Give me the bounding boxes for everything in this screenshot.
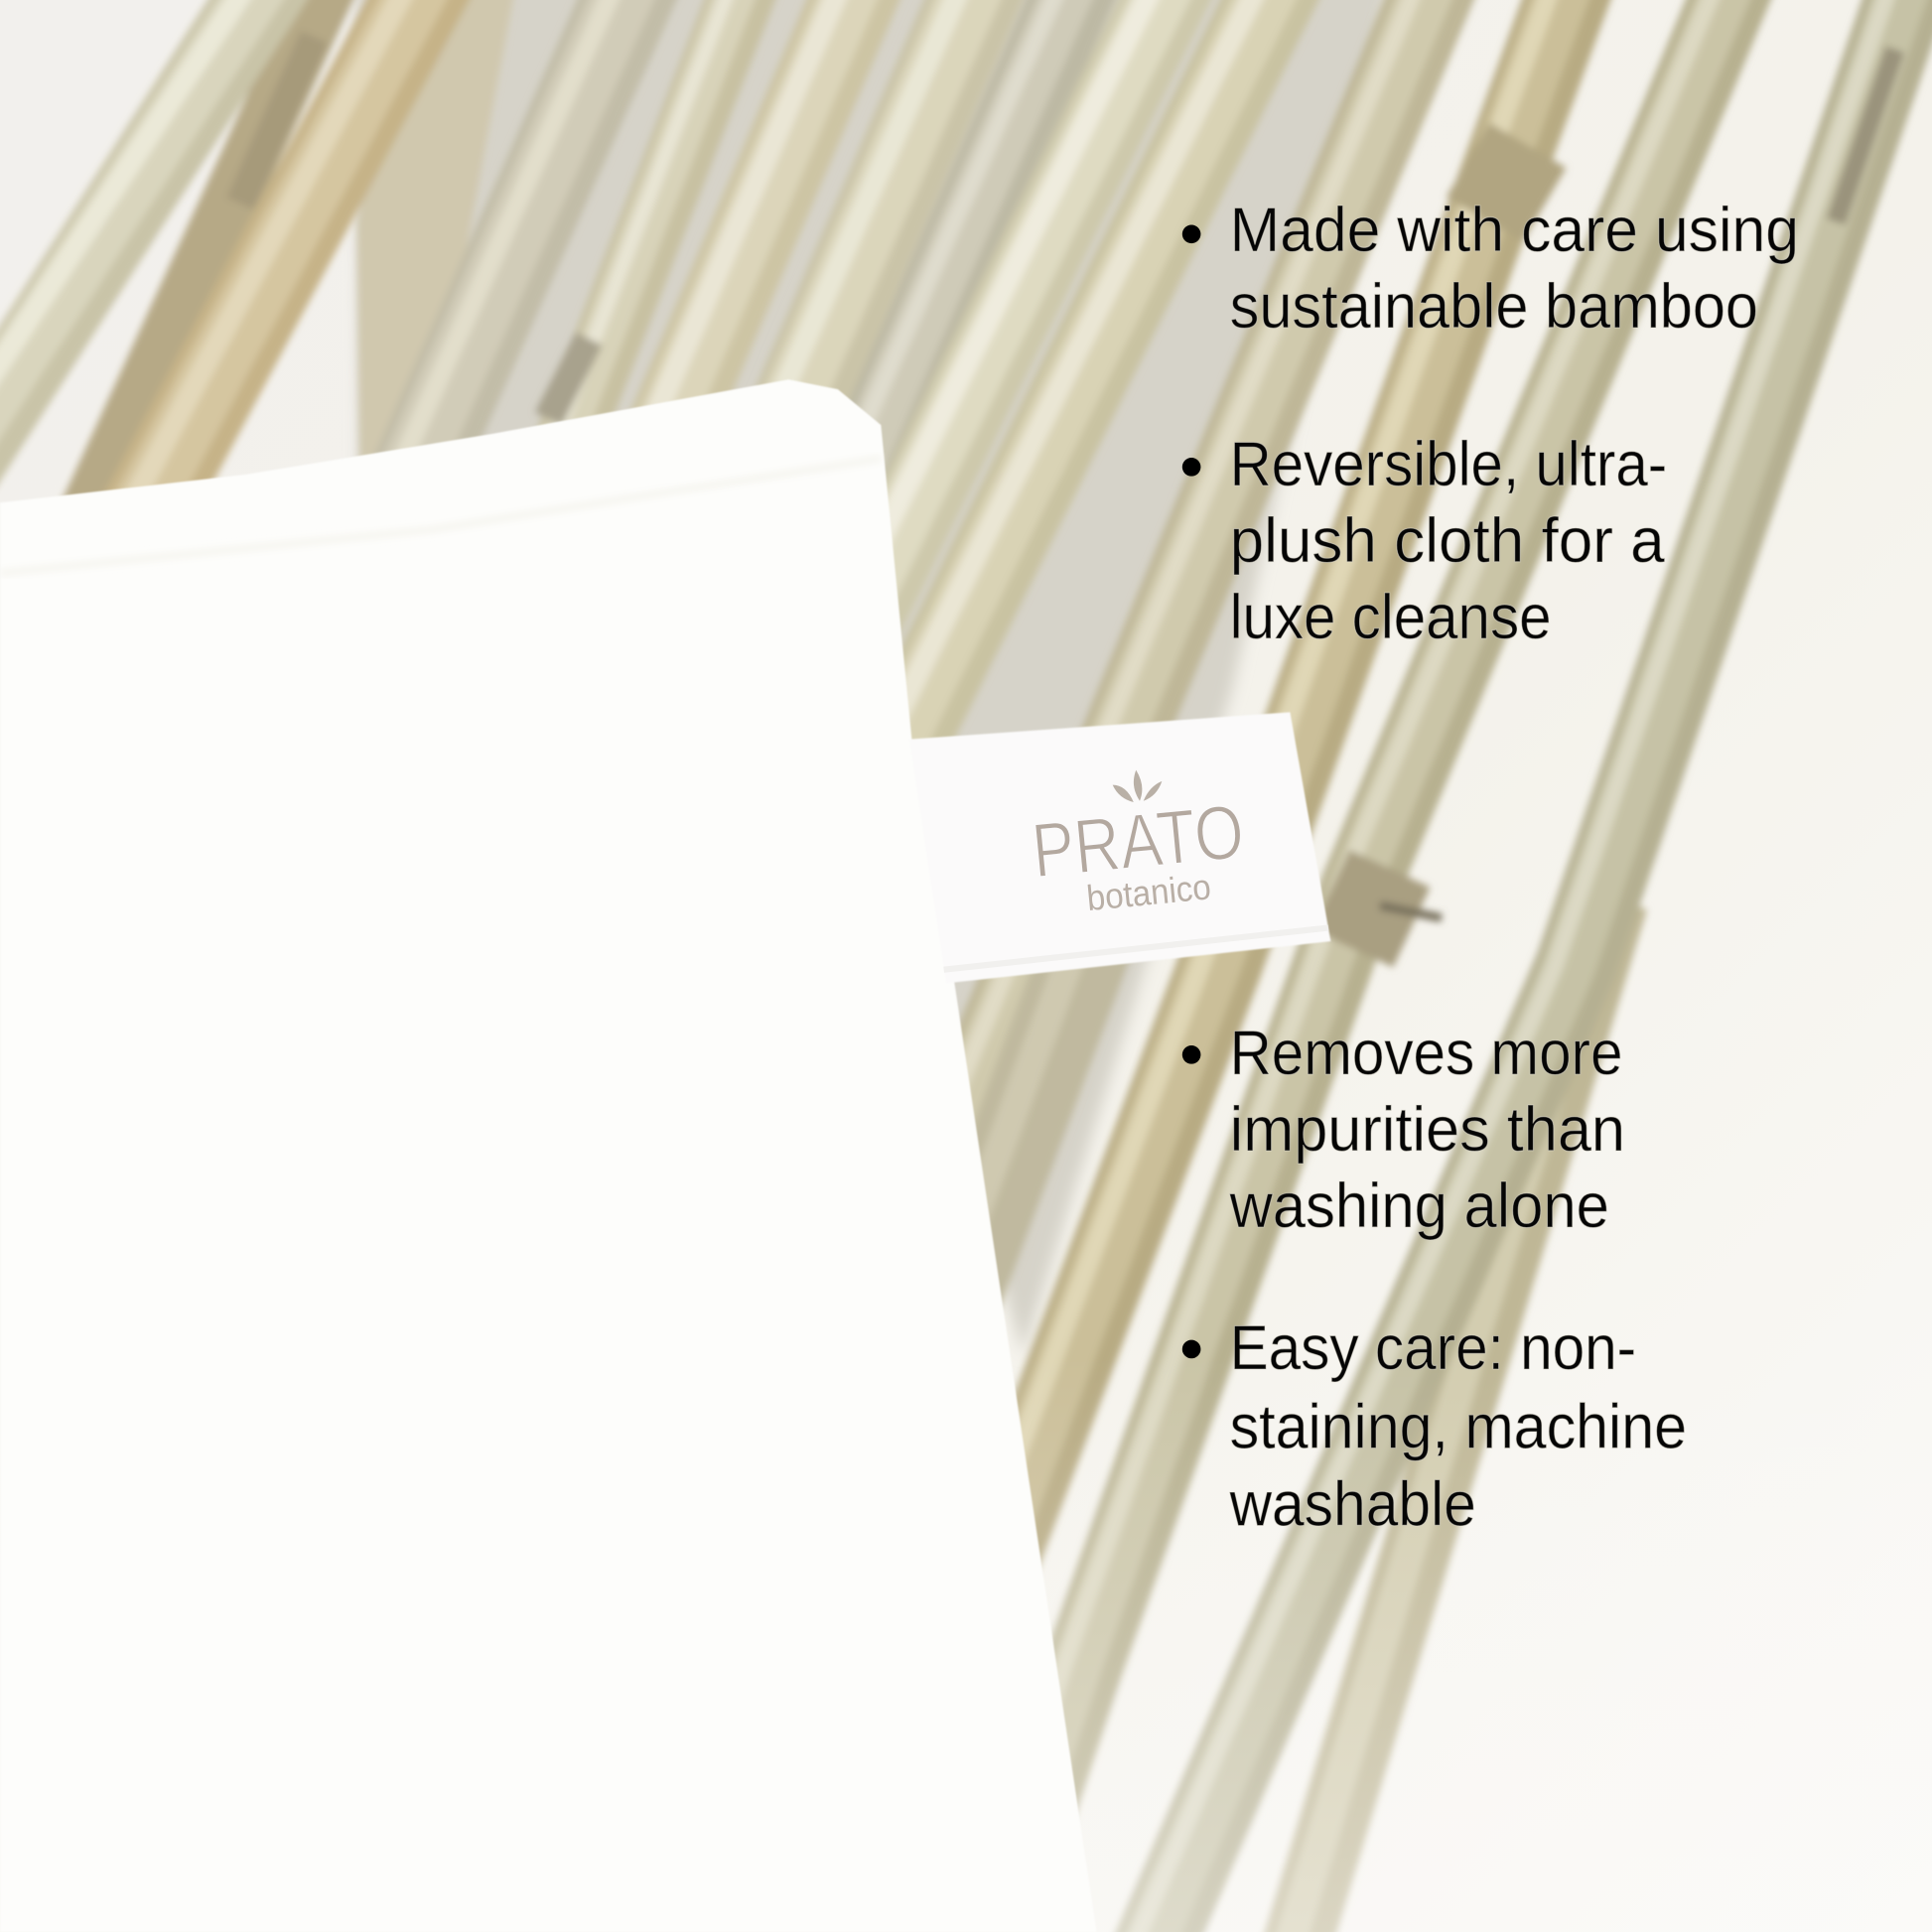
feature: removes impurities: impurities than bbox=[1230, 1095, 1625, 1165]
feature: easy care: washable bbox=[1229, 1469, 1476, 1539]
feature: reversible cloth: Reversible, ultra- bbox=[1230, 430, 1667, 499]
feature: removes impurities: washing alone bbox=[1229, 1172, 1609, 1241]
feature: reversible cloth: plush cloth for a bbox=[1230, 506, 1665, 576]
fabric label tag bbox=[909, 712, 1330, 983]
logo wordmark PRATO: PRATO bbox=[1029, 789, 1248, 895]
feature: easy care: staining, machine bbox=[1230, 1392, 1687, 1461]
feature: made with care: sustainable bamboo bbox=[1230, 272, 1758, 342]
shadow between stems bbox=[357, 0, 1392, 1355]
logo subtitle botanico: botanico bbox=[1085, 866, 1212, 918]
feature: removes impurities bbox=[1182, 1019, 1625, 1241]
feature: made with care: Made with care using bbox=[1230, 196, 1799, 265]
feature: reversible cloth: luxe cleanse bbox=[1230, 583, 1552, 652]
feature: easy care bbox=[1182, 1313, 1687, 1539]
white bamboo cloth bbox=[0, 379, 1097, 1932]
feature: removes impurities: Removes more bbox=[1230, 1019, 1622, 1088]
logo leaves bbox=[1113, 770, 1162, 802]
bottom fade bbox=[0, 1355, 1932, 1932]
feature: made with care bbox=[1182, 196, 1799, 342]
feature: reversible cloth bbox=[1182, 430, 1667, 652]
feature: easy care: Easy care: non- bbox=[1230, 1313, 1636, 1383]
